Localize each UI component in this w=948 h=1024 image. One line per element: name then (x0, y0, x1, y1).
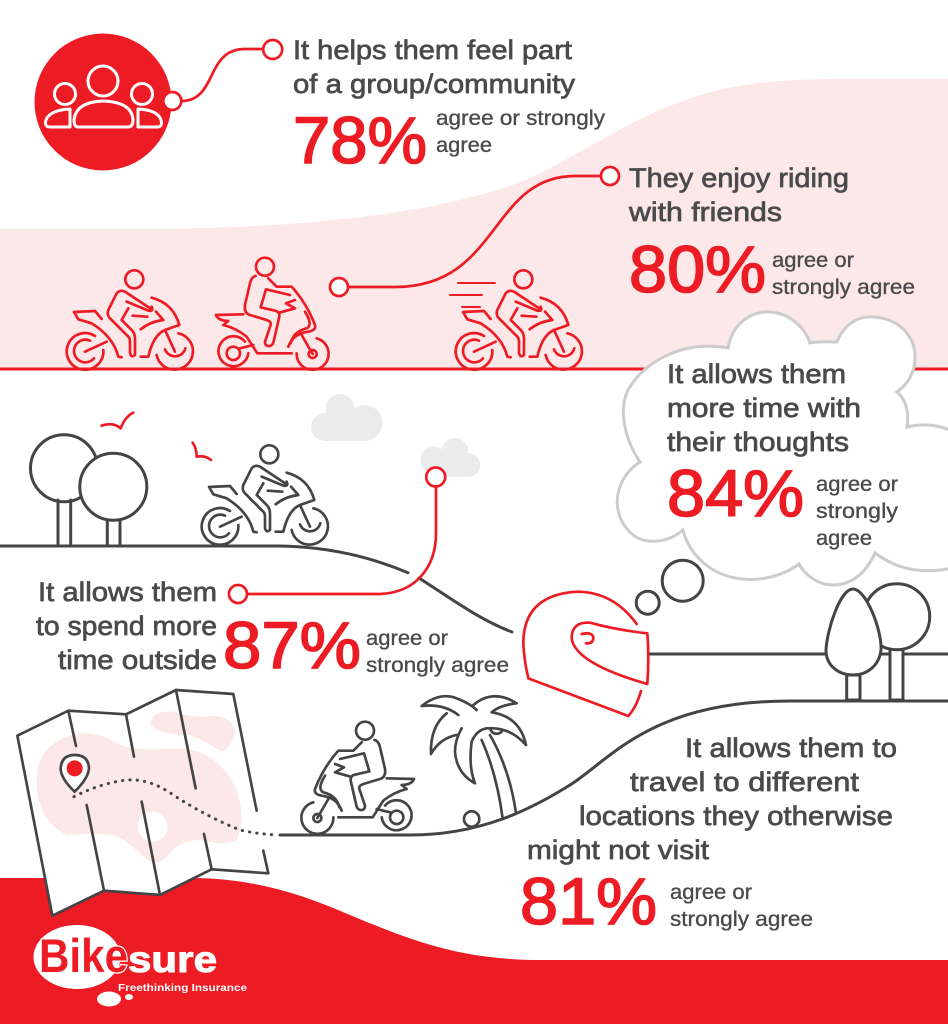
text block: riding with friends 80%: strongly agree (772, 275, 915, 299)
icon: grey cloud large (311, 394, 382, 441)
icon: red birds (102, 413, 211, 460)
text block: travel to different locations 81%: might not visit (527, 835, 710, 865)
text block: time outside 87%: time outside (58, 645, 217, 675)
text block: time outside 87% (36, 577, 509, 682)
text block: part of a group 78%: It helps them feel part (293, 35, 573, 65)
text block: riding with friends 80%: They enjoy riding (629, 163, 849, 193)
text block: time with thoughts 84%: It allows them (667, 359, 846, 389)
logo: Bikesure: sure (128, 939, 217, 980)
icon: two trees right (826, 584, 930, 700)
text block: time outside 87%: agree or (366, 626, 448, 650)
text block: part of a group 78%: of a group/community (293, 69, 576, 99)
text block: time outside 87%: It allows them (38, 577, 217, 607)
text block: travel to different locations 81%: agree or (670, 880, 752, 904)
icon: red scooter (216, 258, 329, 370)
text block: part of a group 78%: 78% (293, 103, 427, 177)
text block: time with thoughts 84%: agree or (816, 472, 898, 496)
text block: time with thoughts 84%: agree (816, 526, 872, 550)
road line: right horizon (650, 652, 948, 656)
icon: folded map with pin and dotted route (17, 690, 278, 916)
text block: riding with friends 80%: agree or (772, 248, 854, 272)
background: red footer hill (0, 878, 948, 1024)
icon: grey cloud small (420, 438, 480, 477)
text block: time with thoughts 84%: their thoughts (667, 427, 849, 457)
text block: riding with friends 80% (628, 163, 915, 306)
connector: community circle to first statement (163, 40, 282, 110)
icon: palm tree (422, 696, 526, 827)
text block: time with thoughts 84%: more time with (667, 393, 861, 423)
text block: travel to different locations 81%: It allows them to (685, 733, 897, 763)
road line: lower hill (280, 701, 948, 835)
text block: part of a group 78%: agree or strongly (436, 106, 605, 130)
text block: time outside 87%: 87% (223, 608, 361, 682)
text block: travel to different locations 81%: locations they otherwise (579, 801, 893, 831)
text block: travel to different locations 81% (520, 733, 897, 938)
text block: travel to different locations 81%: 81% (520, 864, 657, 938)
icon: red sport motorbike (67, 270, 193, 370)
background: pink hill band (0, 79, 948, 369)
text block: time with thoughts 84%: strongly (816, 499, 898, 523)
text block: part of a group 78% (293, 35, 605, 177)
road line: upper hill (0, 546, 512, 632)
icon: dark scooter (301, 722, 414, 834)
text block: riding with friends 80%: with friends (628, 197, 782, 227)
connector: outside statement to cloud (229, 468, 445, 603)
text block: travel to different locations 81%: travel to different (630, 767, 860, 797)
text block: time with thoughts 84%: 84% (667, 456, 804, 530)
text block: travel to different locations 81%: strongly agree (670, 907, 813, 931)
logo: Bikesure: Freethinking Insurance (118, 982, 247, 994)
icon: red helmet (523, 592, 648, 716)
logo: Bikesure (34, 925, 247, 1006)
icon: community circle with three people (34, 34, 172, 170)
text block: time outside 87%: to spend more (36, 611, 217, 641)
connector: scooter to friends statement (330, 167, 619, 296)
text block: time with thoughts 84% (667, 359, 898, 550)
icon: thought bubbles (636, 560, 703, 614)
thought cloud (617, 312, 948, 585)
icon: red motorbike with speed lines (450, 270, 582, 370)
icon: two round trees left (30, 435, 147, 546)
text block: riding with friends 80%: 80% (629, 232, 766, 306)
icon: dark motorbike on hill (202, 445, 328, 545)
text block: time outside 87%: strongly agree (366, 653, 509, 677)
logo: Bikesure: Bike (39, 929, 128, 982)
text block: part of a group 78%: agree (436, 133, 492, 157)
road line: red horizon (0, 368, 948, 370)
